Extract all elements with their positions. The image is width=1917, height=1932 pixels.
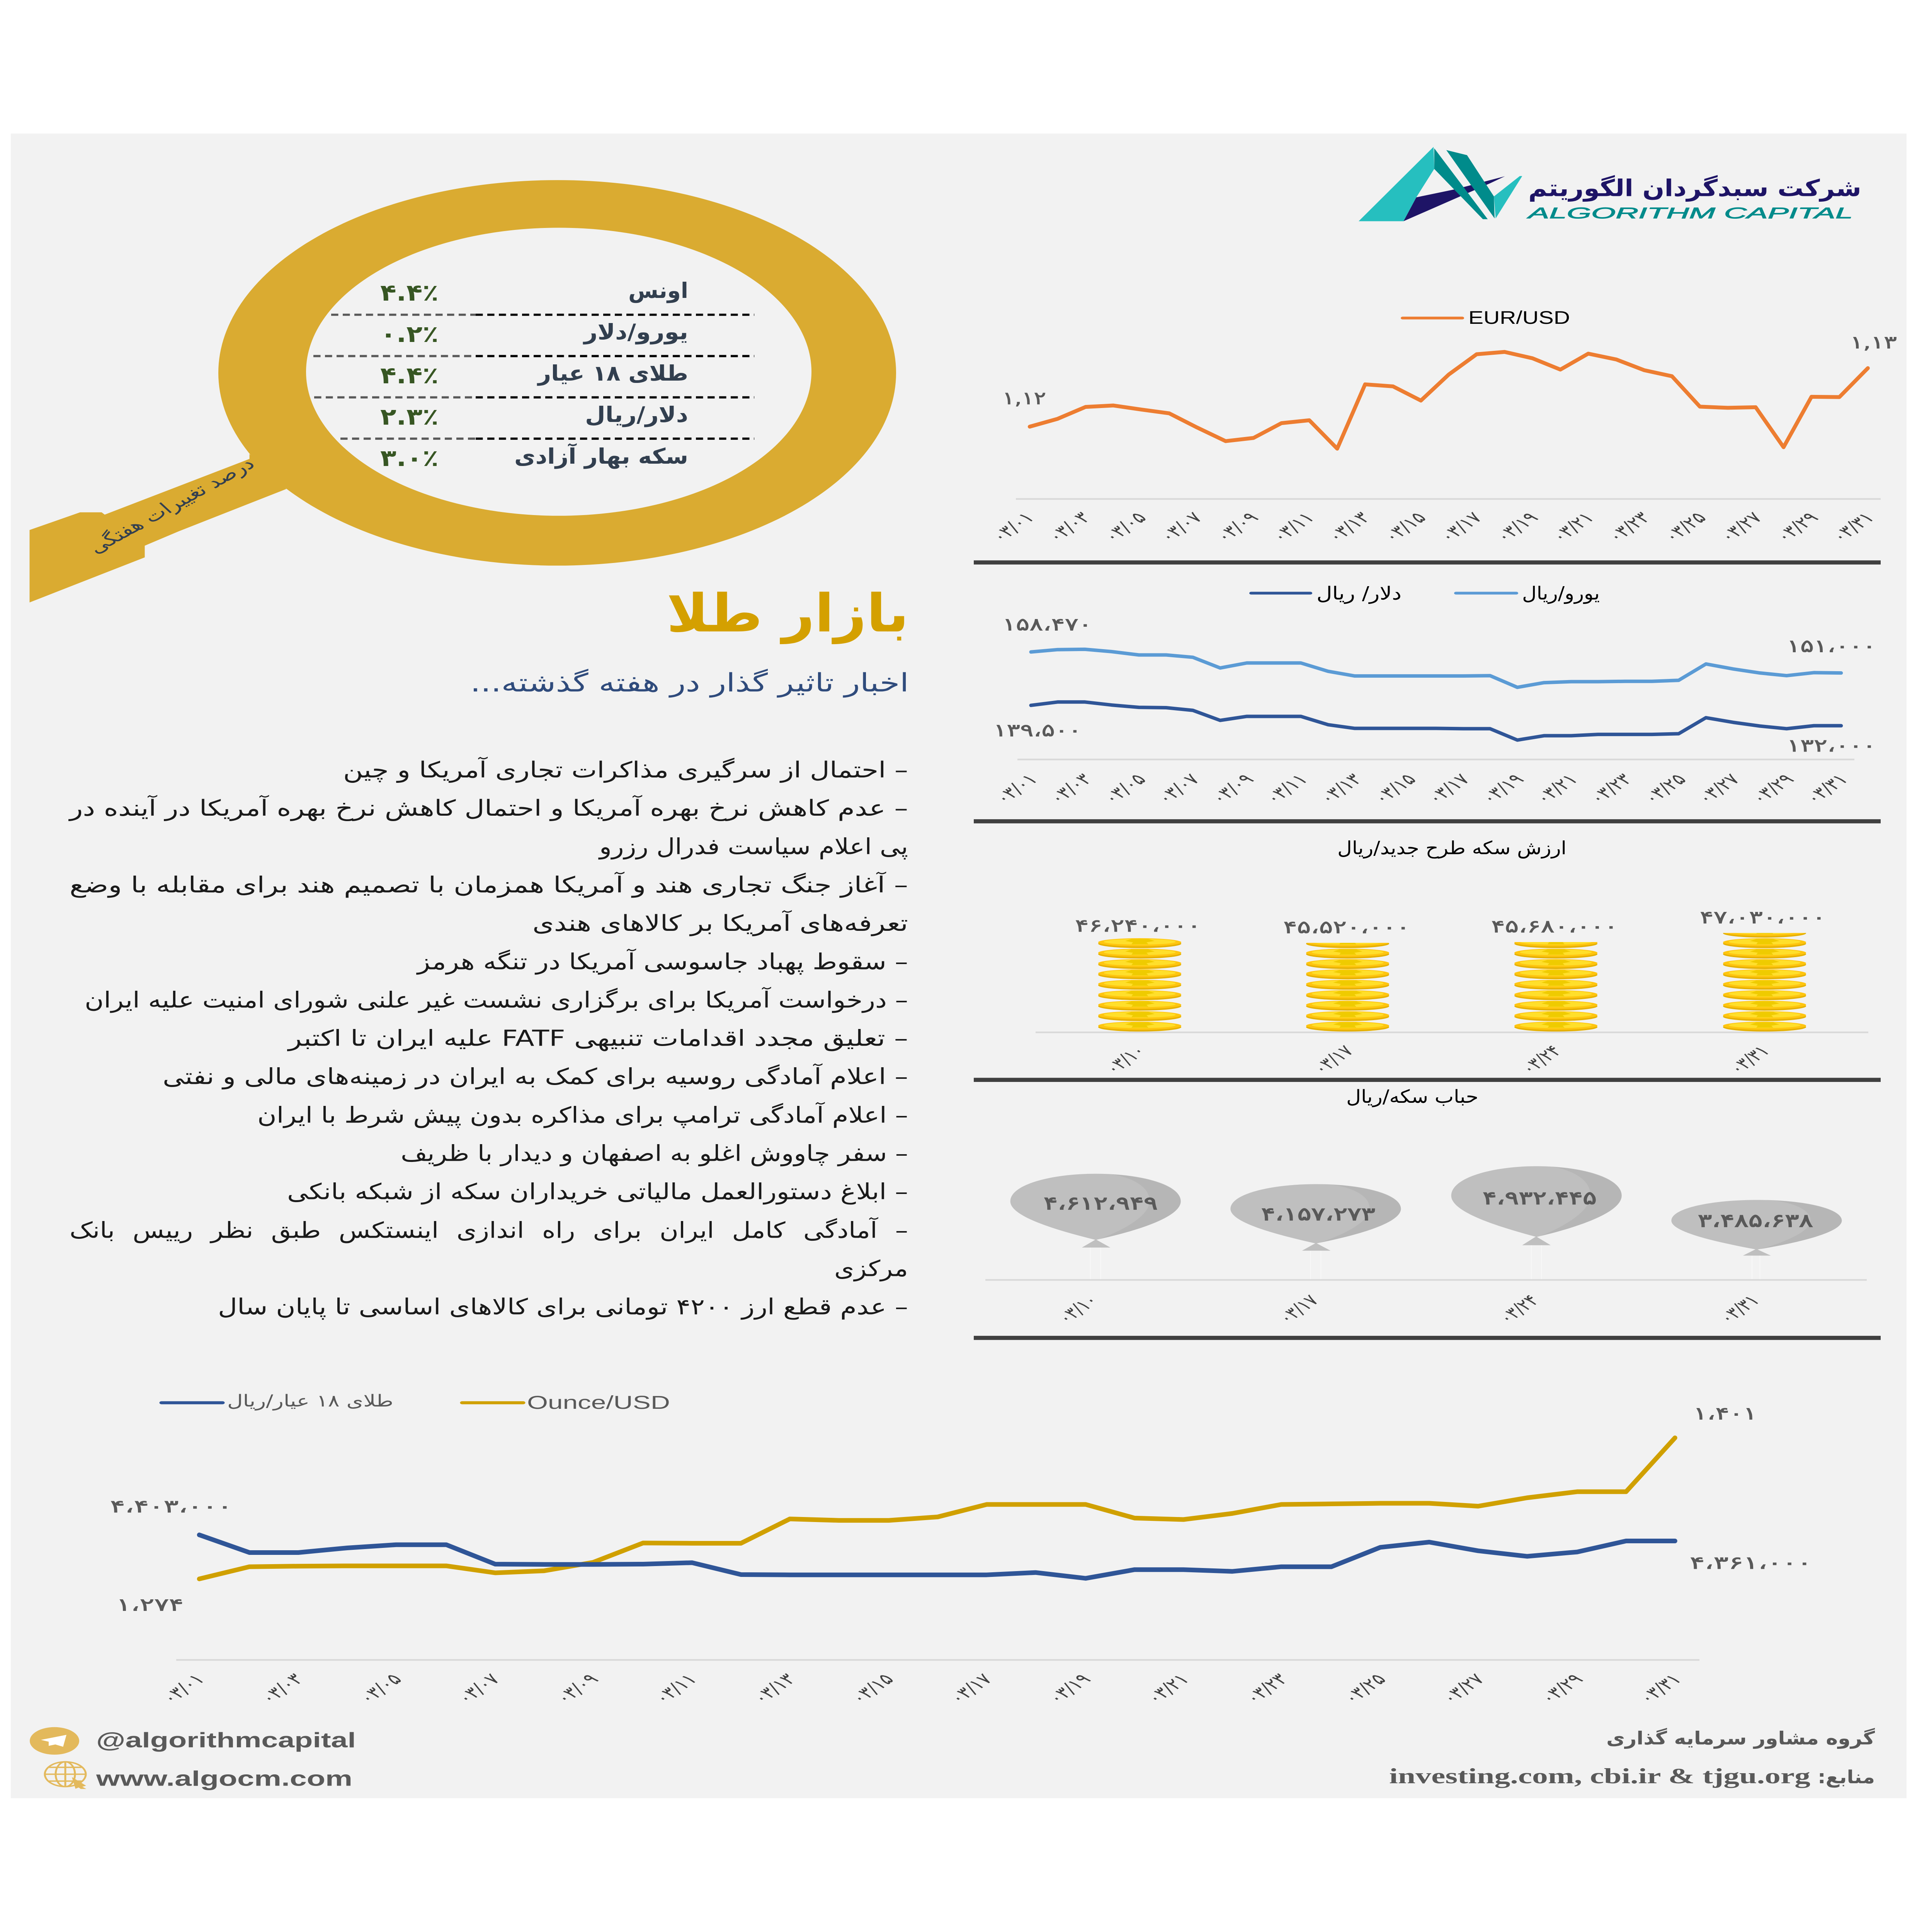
row: ounce: اونس xyxy=(628,278,688,303)
table row dividers xyxy=(313,315,754,439)
values: ۱،۲۷۴ xyxy=(116,1594,184,1615)
date labels: ۰۳/۰۹ xyxy=(1206,770,1259,807)
date labels: ۰۳/۰۱ xyxy=(990,770,1043,807)
date labels: ۰۳/۰۷ xyxy=(1152,770,1204,807)
date labels: ۰۳/۳۱ xyxy=(1724,1041,1774,1078)
row: euro dollar: ۰.۲٪ xyxy=(380,321,439,348)
axis xyxy=(1017,759,1854,760)
website: www.algocm.com xyxy=(96,1767,352,1791)
date labels xyxy=(990,770,1853,807)
logo mark xyxy=(1359,147,1522,221)
date labels: ۰۳/۰۵ xyxy=(1098,508,1151,546)
legend xyxy=(162,1392,670,1413)
date labels: ۰۳/۱۳ xyxy=(1322,508,1375,546)
row: 18k gold xyxy=(380,361,688,389)
logo xyxy=(1359,147,1861,222)
date labels: ۰۳/۰۷ xyxy=(452,1670,505,1707)
date labels: ۰۳/۰۱ xyxy=(986,508,1039,546)
date labels: ۰۳/۱۵ xyxy=(845,1670,898,1707)
date labels: ۰۳/۱۰ xyxy=(1100,1041,1150,1078)
date labels: ۰۳/۲۳ xyxy=(1584,770,1637,807)
balloon 1 xyxy=(1010,1174,1181,1279)
values xyxy=(993,614,1876,756)
date labels: ۰۳/۰۳ xyxy=(1042,508,1095,546)
date labels: ۰۳/۰۵ xyxy=(354,1670,407,1707)
legend: یورو/ریال xyxy=(1522,583,1600,604)
magnifier handle xyxy=(30,454,286,602)
date labels: ۰۳/۲۴ xyxy=(1493,1291,1544,1327)
date labels: ۰۳/۳۱ xyxy=(1800,770,1853,807)
coin values: ۴۷،۰۳۰،۰۰۰ xyxy=(1700,907,1826,928)
coin stack 4 xyxy=(1723,928,1806,1032)
row: bahar azadi coin xyxy=(380,443,688,472)
row: 18k gold: ۴.۴٪ xyxy=(380,362,439,389)
axis xyxy=(176,1659,1699,1661)
date labels: ۰۳/۱۹ xyxy=(1490,508,1543,546)
date labels: ۰۳/۱۳ xyxy=(1314,770,1367,807)
news list: – سفر چاووش اغلو به اصفهان و دیدار با ظریف xyxy=(401,1141,908,1167)
ounce line xyxy=(199,1438,1675,1579)
row: ounce: ۴.۴٪ xyxy=(380,279,439,306)
dollar rial line xyxy=(1031,702,1841,740)
telegram handle: @algorithmcapital xyxy=(96,1728,356,1752)
values: ۱،۴۰۱ xyxy=(1693,1403,1757,1424)
news list: تعرفه‌های آمریکا بر کالاهای هندی xyxy=(532,910,908,936)
row: bahar azadi coin: ۳.۰٪ xyxy=(380,445,439,472)
values: ۱۵۸،۴۷۰ xyxy=(1002,614,1092,635)
axis xyxy=(1016,498,1881,500)
news list xyxy=(68,757,908,1320)
row: dollar rial: ۲.۳٪ xyxy=(380,403,439,430)
coin values: ۴۵،۶۸۰،۰۰۰ xyxy=(1491,916,1618,937)
news list: – ابلاغ دستورالعمل مالیاتی خریداران سکه از شبکه بانکی xyxy=(287,1179,908,1205)
date labels: ۰۳/۰۵ xyxy=(1098,770,1151,807)
date labels: ۰۳/۱۷ xyxy=(944,1670,997,1707)
date labels: ۰۳/۳۱ xyxy=(1633,1670,1686,1707)
date labels: ۰۳/۱۱ xyxy=(649,1670,702,1707)
date labels: ۰۳/۱۱ xyxy=(1260,770,1313,807)
values: ۱۳۹،۵۰۰ xyxy=(993,720,1082,741)
news list: – احتمال از سرگیری مذاکرات تجاری آمریکا و چین xyxy=(343,757,908,783)
chart: EUR/USD xyxy=(986,308,1897,546)
subtitle: اخبار تاثیر گذار در هفته گذشته... xyxy=(470,668,909,698)
news list: – تعلیق مجدد اقدامات تنبیهی FATF علیه ایران تا اکتبر xyxy=(287,1026,908,1051)
coin stack 2 xyxy=(1306,938,1389,1032)
date labels: ۰۳/۳۱ xyxy=(1714,1291,1764,1327)
18k gold line xyxy=(199,1535,1675,1578)
date labels: ۰۳/۲۷ xyxy=(1692,770,1745,807)
date labels: ۰۳/۱۵ xyxy=(1368,770,1421,807)
date labels: ۰۳/۲۷ xyxy=(1714,508,1767,546)
date labels: ۰۳/۲۱ xyxy=(1546,508,1599,546)
date labels xyxy=(986,508,1879,546)
legend xyxy=(1251,583,1600,604)
date labels: ۰۳/۱۳ xyxy=(747,1670,800,1707)
balloon 4 xyxy=(1671,1200,1842,1279)
date labels: ۰۳/۱۹ xyxy=(1476,770,1529,807)
row: dollar rial: دلار/ریال xyxy=(585,402,688,427)
date labels: ۰۳/۲۷ xyxy=(1436,1670,1489,1707)
row: dollar rial xyxy=(380,402,688,430)
date labels: ۰۳/۲۵ xyxy=(1658,508,1711,546)
date labels: ۰۳/۲۹ xyxy=(1746,770,1799,807)
date labels xyxy=(1100,1041,1774,1078)
date labels xyxy=(156,1670,1686,1707)
balloon 2 xyxy=(1230,1184,1401,1279)
news list: مرکزی xyxy=(834,1256,908,1281)
balloon 3: ۴،۹۳۲،۴۴۵ xyxy=(1483,1187,1597,1209)
values: ۴،۳۶۱،۰۰۰ xyxy=(1690,1553,1812,1573)
date labels: ۰۳/۲۳ xyxy=(1602,508,1655,546)
date labels: ۰۳/۲۵ xyxy=(1338,1670,1391,1707)
coin stack 3 xyxy=(1514,938,1597,1032)
axis xyxy=(985,1279,1867,1281)
date labels: ۰۳/۰۳ xyxy=(255,1670,308,1707)
balloon 1: ۴،۶۱۲،۹۴۹ xyxy=(1044,1192,1158,1214)
date labels: ۰۳/۳۱ xyxy=(1826,508,1879,546)
row: euro dollar: یورو/دلار xyxy=(583,319,688,345)
date labels: ۰۳/۰۷ xyxy=(1154,508,1207,546)
date labels: ۰۳/۰۳ xyxy=(1044,770,1097,807)
balloon 4: ۳،۴۸۵،۶۳۸ xyxy=(1698,1210,1813,1231)
date labels: ۰۳/۱۷ xyxy=(1434,508,1487,546)
values xyxy=(110,1403,1812,1615)
chart: new coin value xyxy=(1036,837,1868,1078)
date labels: ۰۳/۰۹ xyxy=(550,1670,603,1707)
legend: طلای ۱۸ عیار/ریال xyxy=(227,1392,393,1411)
logo latin name: ALGORITHM CAPITAL xyxy=(1526,205,1853,222)
legend: دلار/ ریال xyxy=(1317,583,1402,604)
balloon 3 xyxy=(1451,1166,1622,1279)
date labels: ۰۳/۲۴ xyxy=(1516,1041,1566,1078)
news list: – عدم کاهش نرخ بهره آمریکا و احتمال کاهش نرخ بهره آمریکا در آینده در xyxy=(68,795,908,821)
news list: – اعلام آمادگی روسیه برای کمک به ایران در زمینه‌های مالی و نفتی xyxy=(163,1063,908,1090)
date labels: ۰۳/۲۱ xyxy=(1530,770,1583,807)
magnifier lens xyxy=(306,228,811,516)
value: start: ۱,۱۲ xyxy=(1002,388,1046,409)
chart: 18k gold and ounce xyxy=(110,1392,1812,1707)
coin stack 1 xyxy=(1098,938,1181,1032)
values: ۴،۴۰۳،۰۰۰ xyxy=(110,1496,232,1517)
chart heading: حباب سکه/ریال xyxy=(1346,1086,1478,1107)
title: بازار طلا xyxy=(667,583,909,644)
chart: dollar and euro in rial xyxy=(990,583,1876,807)
date labels: ۰۳/۱۷ xyxy=(1308,1041,1358,1078)
icon: telegram xyxy=(30,1727,79,1755)
row: euro dollar xyxy=(380,319,688,348)
news list: – آغاز جنگ تجاری هند و آمریکا همزمان با تصمیم هند برای مقابله با وضع xyxy=(70,872,908,898)
news list: – اعلام آمادگی ترامپ برای مذاکره بدون پیش شرط با ایران xyxy=(257,1102,908,1128)
EUR/USD line xyxy=(1030,352,1868,449)
date labels: ۰۳/۲۳ xyxy=(1240,1670,1293,1707)
icon: globe xyxy=(45,1762,86,1788)
news list: پی اعلام سیاست فدرال رزرو xyxy=(598,834,908,860)
footer: contact xyxy=(30,1727,356,1791)
date labels: ۰۳/۱۹ xyxy=(1043,1670,1095,1707)
news list: – عدم قطع ارز ۴۲۰۰ تومانی برای کالاهای اساسی تا پایان سال xyxy=(218,1294,908,1320)
handle label: درصد تغییرات هفتگی xyxy=(83,454,260,557)
news list: – درخواست آمریکا برای برگزاری نشست غیر علنی شورای امنیت علیه ایران xyxy=(85,986,908,1013)
date labels: ۰۳/۰۱ xyxy=(156,1670,209,1707)
date labels: ۰۳/۱۱ xyxy=(1266,508,1319,546)
date labels xyxy=(1052,1291,1764,1327)
values: ۱۳۲،۰۰۰ xyxy=(1787,735,1876,756)
news list: – آمادگی کامل ایران برای راه اندازی اینستکس طبق نظر رییس بانک xyxy=(70,1217,908,1243)
magnifier: weekly change table xyxy=(30,180,896,602)
legend: EUR/USD xyxy=(1468,308,1570,328)
footer: sources: :منابع xyxy=(1818,1767,1875,1788)
date labels: ۰۳/۲۹ xyxy=(1535,1670,1588,1707)
chart: coin bubble balloons xyxy=(985,1086,1867,1327)
values: ۱۵۱،۰۰۰ xyxy=(1787,636,1876,656)
euro rial line xyxy=(1031,649,1841,687)
legend: Ounce/USD xyxy=(527,1392,670,1413)
value: end: ۱,۱۳ xyxy=(1850,332,1897,353)
date labels: ۰۳/۱۵ xyxy=(1378,508,1431,546)
date labels: ۰۳/۱۰ xyxy=(1052,1291,1103,1327)
magnifier ring xyxy=(218,180,896,566)
coin values: ۴۶،۲۴۰،۰۰۰ xyxy=(1075,915,1201,936)
coin values xyxy=(1075,907,1826,938)
row: bahar azadi coin: سکه بهار آزادی xyxy=(514,443,688,469)
balloon 2: ۴،۱۵۷،۲۷۳ xyxy=(1261,1203,1375,1225)
chart heading: ارزش سکه طرح جدید/ریال xyxy=(1337,837,1567,859)
date labels: ۰۳/۲۵ xyxy=(1638,770,1691,807)
date labels: ۰۳/۰۹ xyxy=(1210,508,1263,546)
date labels: ۰۳/۱۷ xyxy=(1273,1291,1323,1327)
row: 18k gold: طلای ۱۸ عیار xyxy=(537,361,688,386)
row: ounce xyxy=(380,278,688,306)
coin values: ۴۵،۵۲۰،۰۰۰ xyxy=(1283,917,1410,938)
date labels: ۰۳/۲۹ xyxy=(1770,508,1823,546)
date labels: ۰۳/۲۱ xyxy=(1141,1670,1194,1707)
footer: sources: investing.com, cbi.ir & tjgu.org xyxy=(1389,1764,1810,1788)
date labels: ۰۳/۱۷ xyxy=(1422,770,1475,807)
news list: – سقوط پهباد جاسوسی آمریکا در تنگه هرمز xyxy=(416,948,908,975)
axis xyxy=(1036,1032,1868,1033)
